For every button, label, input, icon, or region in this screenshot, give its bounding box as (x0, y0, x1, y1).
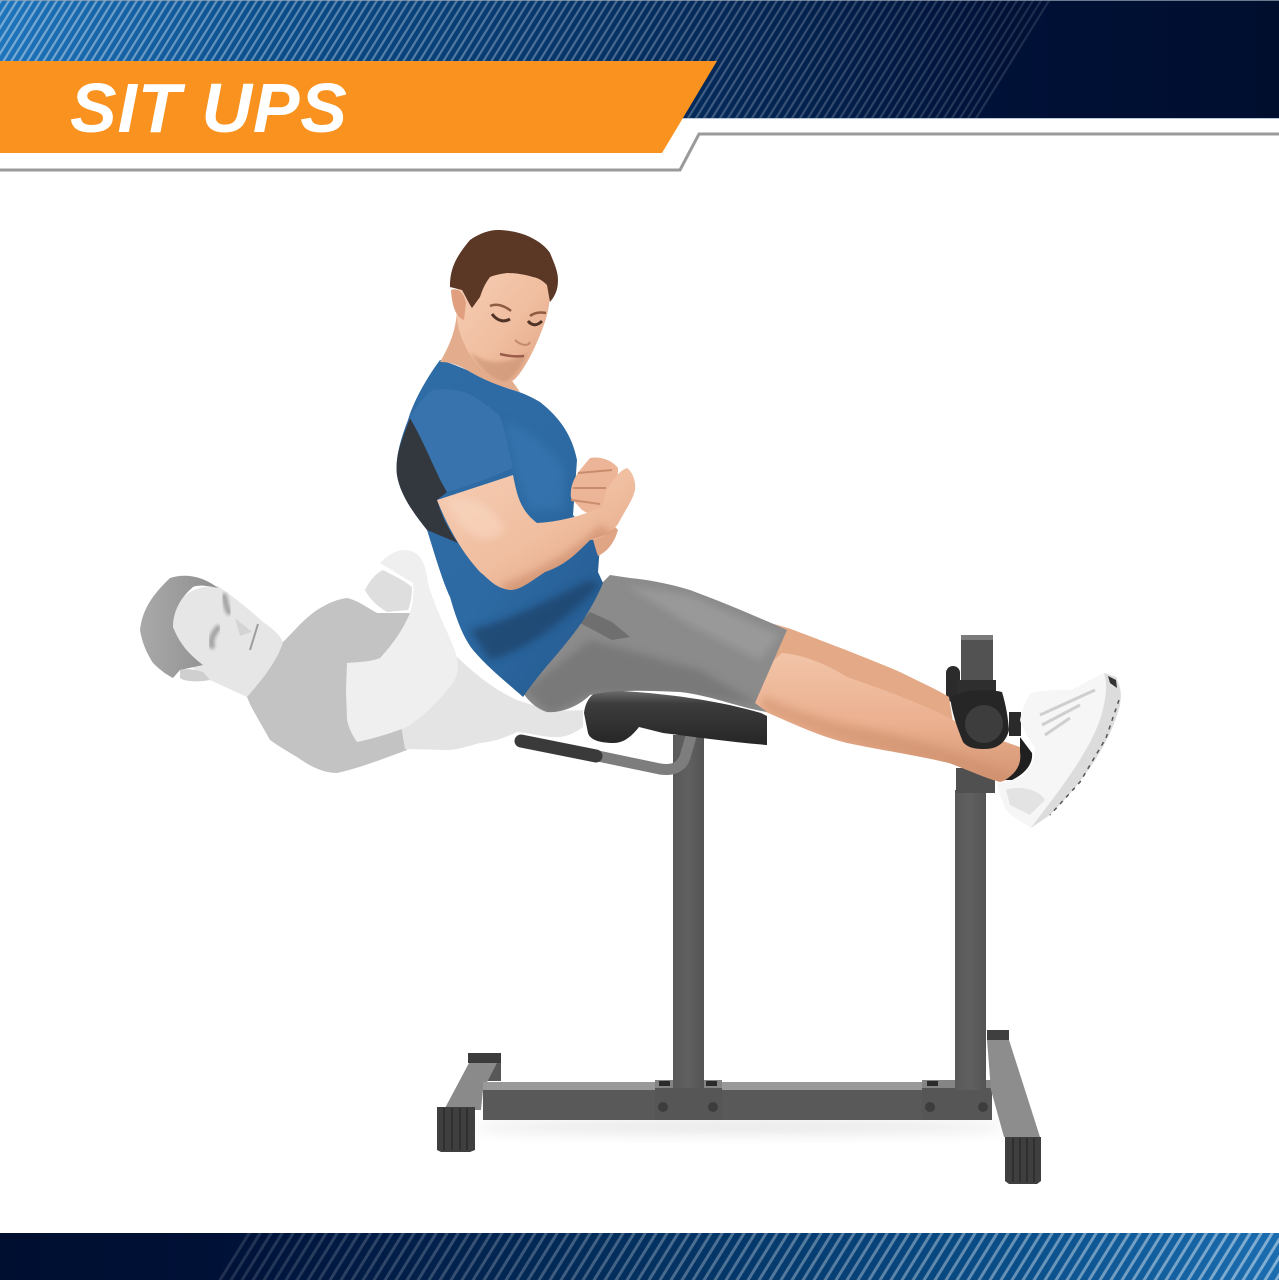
ghost fist (365, 570, 412, 612)
ghost arm (346, 550, 458, 742)
man: torso in blue shirt (395, 360, 603, 697)
man: shorts (523, 575, 787, 715)
top of ankle post (961, 635, 993, 695)
rear upright post (955, 790, 986, 1090)
seat pad (584, 690, 767, 745)
rear left foot tube (437, 1053, 501, 1152)
hair (450, 230, 558, 308)
ghost figure: lowered sit up position (140, 550, 583, 773)
shirt dark side panel (395, 418, 458, 543)
ghost torso (247, 598, 415, 773)
header outline strip (0, 134, 1279, 170)
ankle roller pad (950, 680, 1021, 749)
man: legs (740, 620, 1023, 782)
calf shading (760, 696, 976, 768)
front upright post (673, 735, 704, 1088)
face (457, 270, 550, 384)
crossbar (483, 1080, 992, 1120)
title text: SIT UPS (70, 69, 347, 147)
ear (451, 289, 466, 320)
man: sock (1005, 737, 1032, 780)
man: neck and head (440, 230, 558, 392)
header banner (0, 0, 1279, 119)
man: clasped hands (571, 457, 618, 556)
man: white sneaker (997, 673, 1121, 828)
far leg (760, 620, 953, 722)
roller end cap (965, 705, 1003, 743)
shirt sleeve (410, 389, 513, 492)
far ankle pad (946, 666, 960, 702)
man: folded arm (437, 468, 635, 600)
ghost head (140, 576, 283, 697)
hand grip bar (521, 733, 692, 770)
ghost lower shirt (400, 650, 583, 750)
ankle post sleeve (956, 768, 995, 793)
front right foot tube (987, 1030, 1041, 1184)
near leg (740, 653, 1023, 782)
eyes and brows (490, 305, 546, 325)
footer banner (0, 1233, 1279, 1280)
jaw stubble (470, 352, 528, 382)
floor shadow (470, 1121, 1010, 1133)
title banner (0, 61, 717, 153)
bench frame (437, 635, 1041, 1184)
nose and mouth (500, 340, 530, 356)
